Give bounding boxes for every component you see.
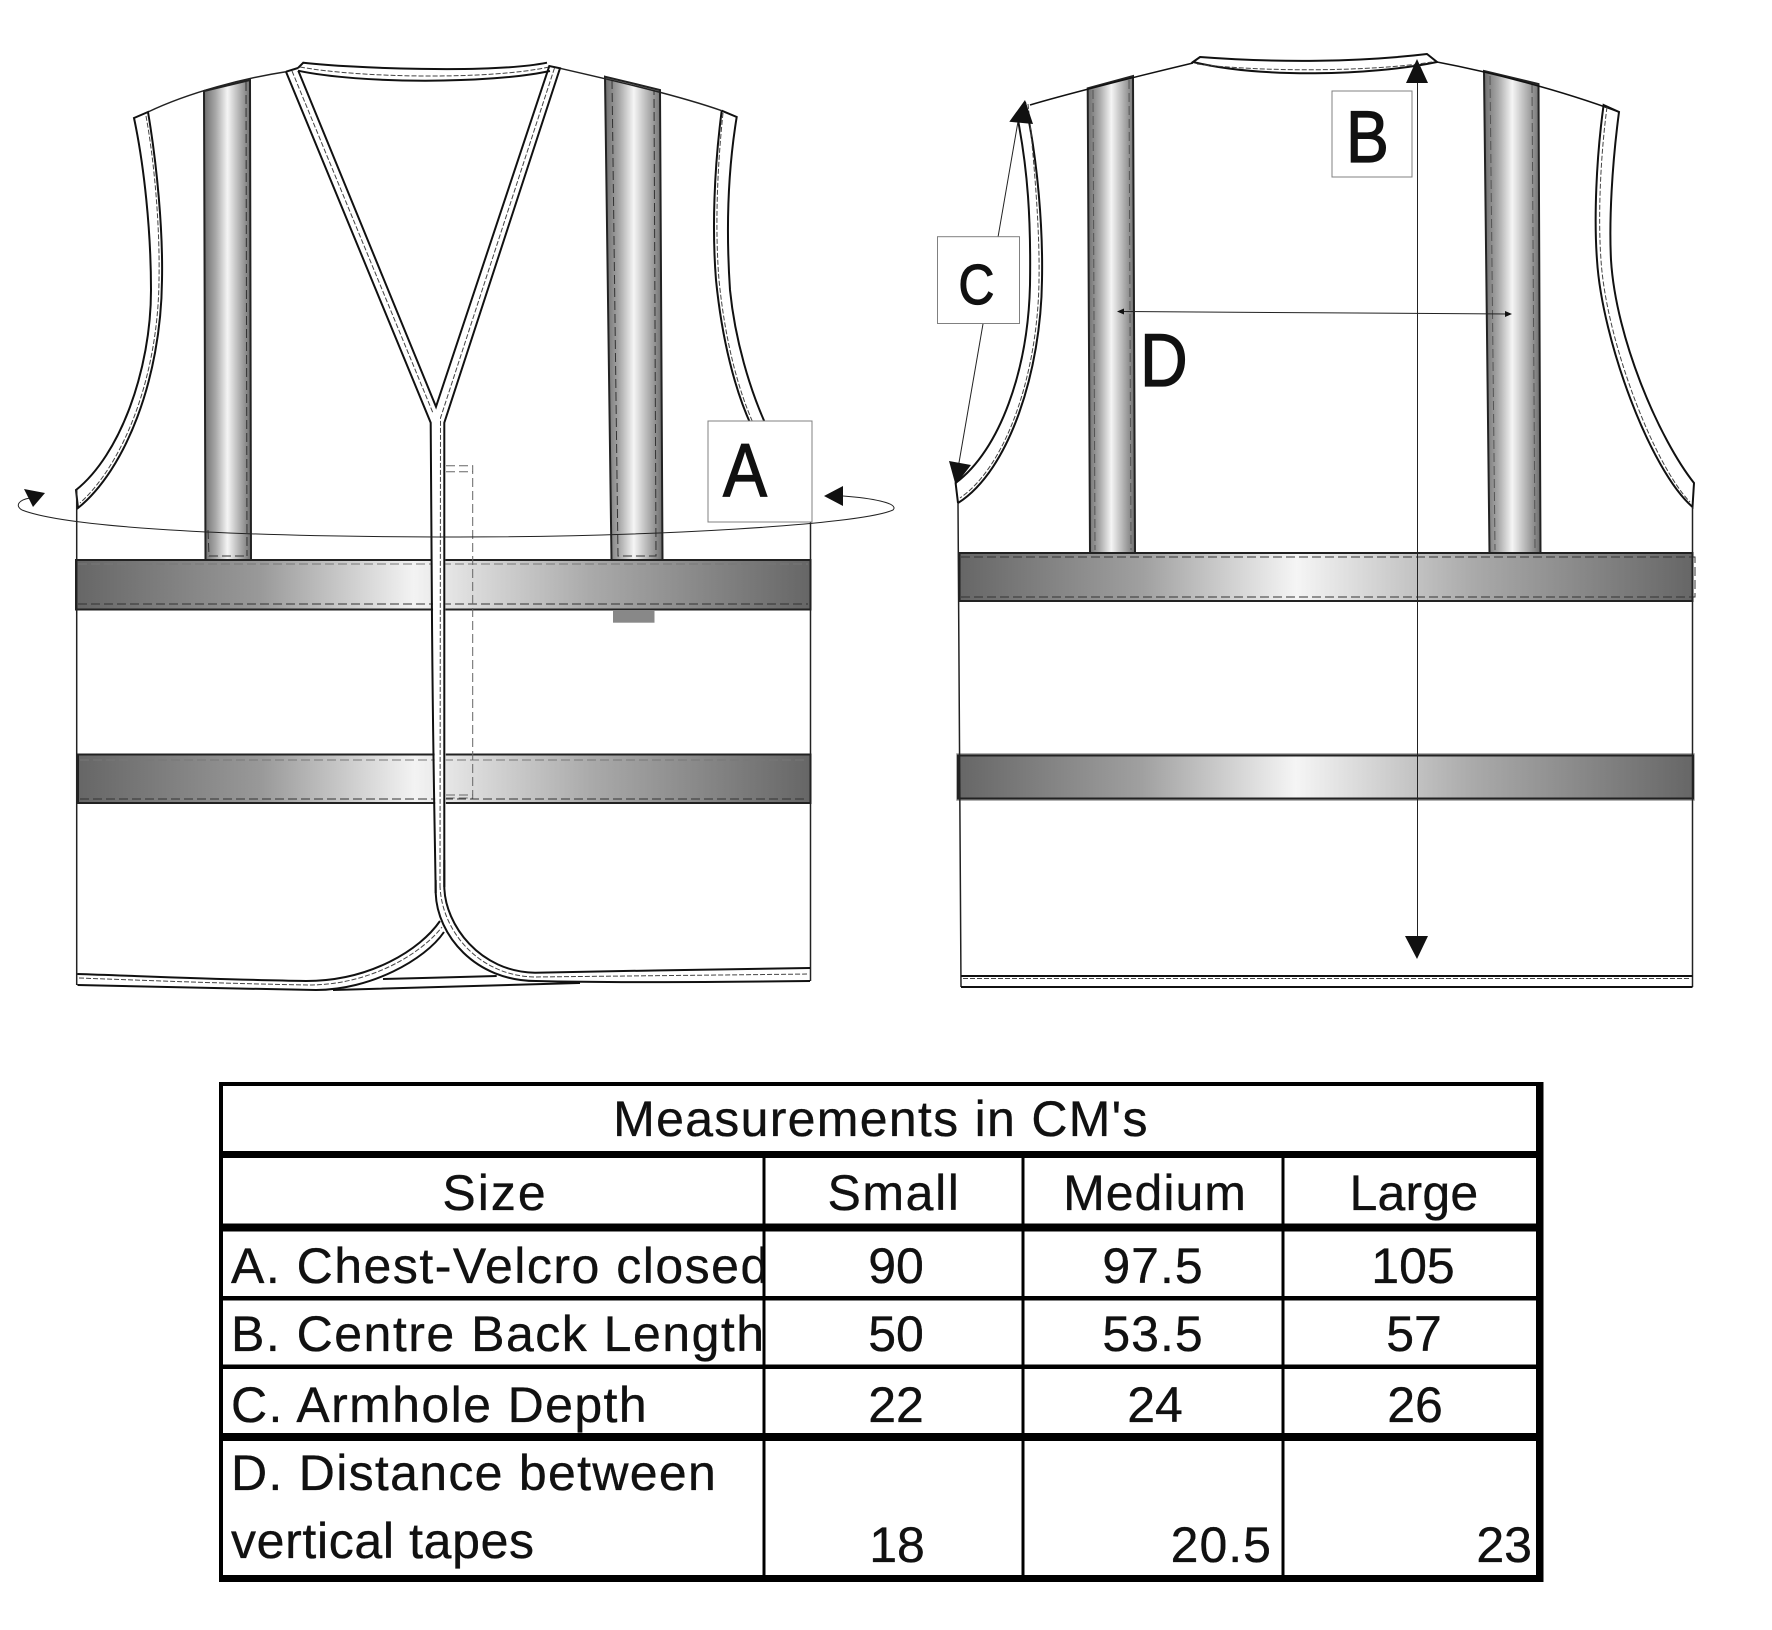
front vest diagram <box>18 63 894 990</box>
back vest: left vertical tape <box>1088 76 1135 553</box>
arrow: chest circumference A <box>18 486 894 537</box>
arrow: distance between vertical tapes D <box>1117 308 1512 317</box>
table header row: Large <box>1350 1165 1478 1221</box>
front vest: right front hem <box>436 860 810 982</box>
row D: distance between tapes: 20.5 <box>1171 1517 1272 1573</box>
table title: Measurements in CM's <box>613 1091 1149 1147</box>
front vest: right armhole binding <box>714 111 766 425</box>
label: armhole depth C box: C <box>958 254 994 317</box>
table header row: Small <box>827 1165 961 1221</box>
label: armhole depth C box <box>938 237 1020 324</box>
row C: armhole depth: C. Armhole Depth <box>231 1377 648 1433</box>
row C: armhole depth <box>231 1377 1443 1433</box>
back vest: waist band <box>957 754 1694 800</box>
table header row: Medium <box>1063 1165 1247 1221</box>
row A: chest: 97.5 <box>1102 1238 1204 1294</box>
row A: chest: 105 <box>1371 1238 1455 1294</box>
table grid <box>219 1082 1544 1582</box>
front vest: size label tab <box>613 610 654 623</box>
row C: armhole depth: 24 <box>1127 1377 1183 1433</box>
front vest: left armhole binding <box>76 112 162 508</box>
back vest: right armhole binding <box>1596 105 1694 507</box>
label: centre back B box: B <box>1346 96 1389 178</box>
table header row <box>442 1165 1478 1221</box>
label: centre back B box <box>1332 91 1412 178</box>
label: distance D: D <box>1140 318 1188 402</box>
back vest: neckline and shoulder seams <box>1030 54 1619 112</box>
back vest: body side seams and hem <box>958 503 1692 987</box>
row C: armhole depth: 26 <box>1387 1377 1443 1433</box>
back vest: chest band <box>960 553 1695 601</box>
row D: distance between tapes: D. Distance between <box>231 1445 717 1501</box>
row C: armhole depth: 22 <box>868 1377 924 1433</box>
row D: distance between tapes: 23 <box>1476 1517 1532 1573</box>
row B: centre back length: B. Centre Back Length <box>231 1306 766 1362</box>
front vest: velcro closure (dashed) <box>446 466 473 798</box>
front vest: waist band <box>78 754 810 803</box>
front vest: neckline and shoulder seams <box>148 63 722 112</box>
front vest: left front hem <box>78 921 580 990</box>
row A: chest <box>230 1246 1453 1284</box>
row B: centre back length: 50 <box>868 1306 924 1362</box>
back vest: right vertical tape <box>1484 71 1540 553</box>
row A: chest: 90 <box>868 1238 924 1294</box>
label: chest A box: A <box>723 428 767 512</box>
row A: chest: A. Chest-Velcro closed <box>231 1238 770 1294</box>
arrow: armhole depth C <box>949 100 1033 485</box>
label: chest A box <box>708 421 812 522</box>
row D: distance between tapes <box>231 1445 1532 1573</box>
table header row: Size <box>442 1165 548 1221</box>
measurement table <box>219 1082 1544 1582</box>
row D: distance between tapes: vertical tapes <box>231 1513 535 1569</box>
row B: centre back length: 57 <box>1386 1306 1442 1362</box>
row D: distance between tapes: 18 <box>869 1517 925 1573</box>
front vest: body side seams <box>77 490 810 985</box>
back vest: left armhole binding <box>956 102 1042 503</box>
back vest diagram <box>938 54 1695 987</box>
front vest: V-neck binding and placket <box>286 66 560 893</box>
row B: centre back length: 53.5 <box>1102 1306 1204 1362</box>
front vest: right vertical tape <box>605 77 662 560</box>
row B: centre back length <box>234 1314 1440 1362</box>
arrow: centre back length B <box>1405 59 1428 959</box>
front vest: left vertical tape <box>204 80 251 560</box>
front vest: chest band <box>76 560 810 610</box>
